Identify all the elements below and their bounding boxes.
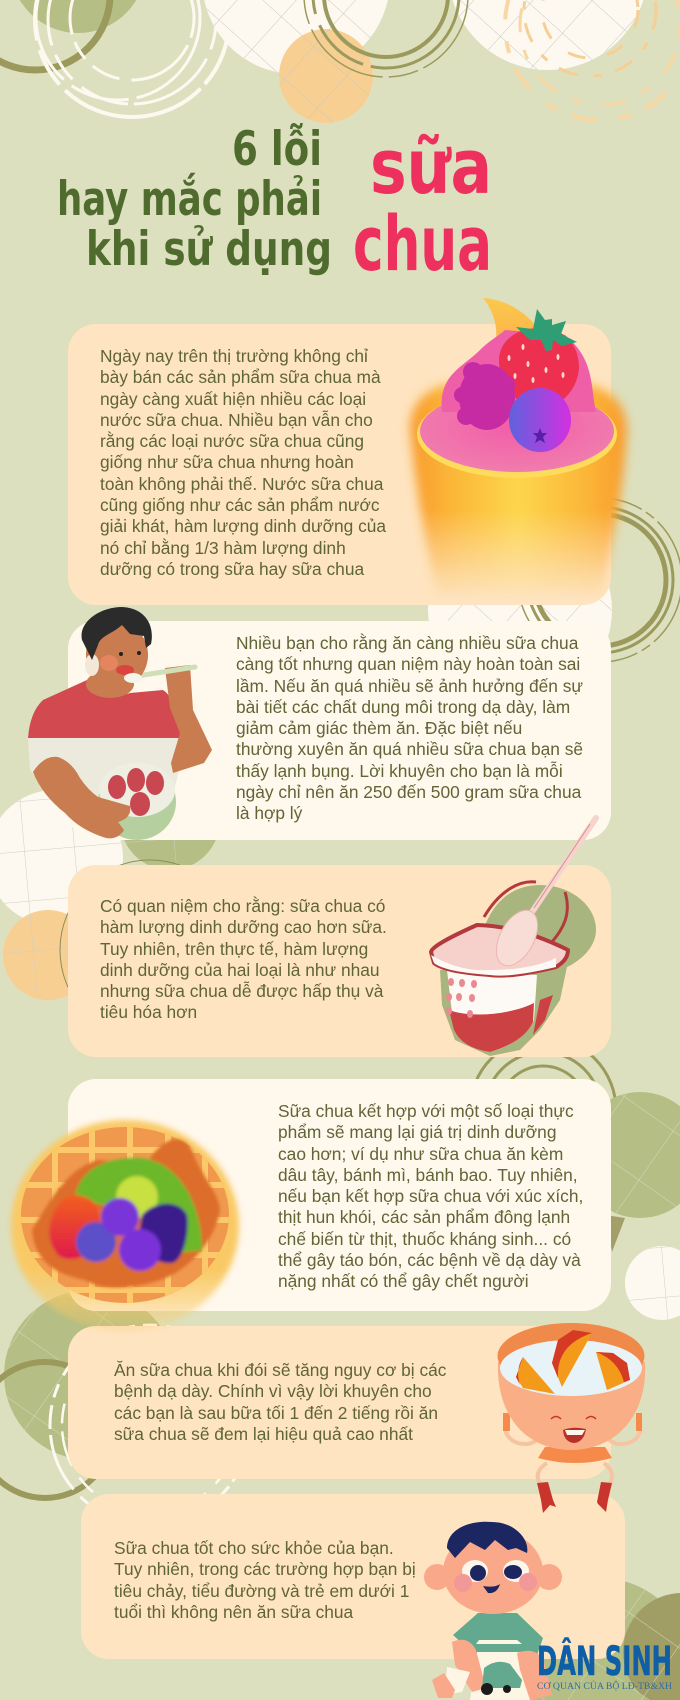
- panel 6: [81, 1494, 625, 1659]
- panel 2 text: là hợp lý: [236, 803, 302, 823]
- panel 4 text: phẩm sẽ mang lại giá trị dinh dưỡng: [278, 1122, 556, 1142]
- panel 6 text: tiêu chảy, tiểu đường và trẻ em dưới 1: [114, 1581, 409, 1601]
- panel 3 text: Có quan niệm cho rằng: sữa chua có: [100, 896, 385, 916]
- panel 4 text: [278, 1101, 583, 1291]
- panel 2 text: ngày chỉ nên ăn 250 đến 500 gram sữa chua: [236, 782, 581, 802]
- panel 5 text: sữa chua sẽ đem lại hiệu quả cao nhất: [114, 1424, 413, 1444]
- panel 4 text: nặng nhất có thể gây chết người: [278, 1271, 529, 1291]
- panel 4 text: chế biến từ thịt, thuốc kháng sinh... có: [278, 1229, 571, 1249]
- panel 3 text: nhưng sữa chua dễ được hấp thụ và: [100, 981, 383, 1001]
- panel 4 text: nếu bạn kết hợp sữa chua với xúc xích,: [278, 1186, 583, 1206]
- panel 1 text: ngày càng xuất hiện nhiều các loại: [100, 389, 366, 409]
- panel 4 text: cao hơn; ví dụ như sữa chua ăn kèm: [278, 1144, 563, 1164]
- panel 1 text: [100, 346, 386, 579]
- panel 1 text: bày bán các sản phẩm sữa chua mà: [100, 367, 381, 387]
- panel 4 text: Sữa chua kết hợp với một số loại thực: [278, 1101, 574, 1121]
- title: green heading: hay mắc phải: [57, 172, 322, 227]
- illustration: smiling yogurt bowl character: [498, 1323, 645, 1513]
- panel 5 text: [114, 1360, 446, 1444]
- panel 1 text: giống như sữa chua nhưng hoàn: [100, 452, 354, 472]
- title: green heading: khi sử dụng: [86, 222, 332, 277]
- panel 6 text: Sữa chua tốt cho sức khỏe của bạn.: [114, 1538, 394, 1558]
- illustration: waffle with fruit: [10, 1120, 250, 1332]
- panel 1 text: cũng giống như các sản phẩm nước: [100, 495, 380, 515]
- panel 1 text: rằng các loại nước sữa chua cũng: [100, 431, 364, 451]
- panel 6 text: [114, 1538, 416, 1622]
- panel 1 text: toàn không phải thế. Nước sữa chua: [100, 474, 383, 494]
- panel 2 text: thường xuyên ăn quá nhiều sữa chua bạn sẽ: [236, 739, 583, 759]
- panel 4 text: dâu tây, bánh mì, bánh bao. Tuy nhiên,: [278, 1165, 578, 1185]
- illustration: boy with toy car: [424, 1522, 562, 1700]
- panel 2 text: bài tiết các chất dung môi trong dạ dày, làm: [236, 697, 570, 717]
- panel 4 text: thể gây táo bón, các bệnh về dạ dày và: [278, 1250, 581, 1270]
- panel 1 text: nước sữa chua. Nhiều bạn vẫn cho: [100, 410, 373, 430]
- panel 2 text: Nhiều bạn cho rằng ăn càng nhiều sữa chua: [236, 633, 578, 653]
- panel 3 text: Tuy nhiên, trên thực tế, hàm lượng: [100, 939, 368, 959]
- title: green heading: 6 lỗi: [232, 122, 322, 177]
- panel 1: [68, 324, 611, 605]
- panel 1 text: giải khát, hàm lượng dinh dưỡng của: [100, 516, 386, 536]
- logo: Dân Sinh: CƠ QUAN CỦA BỘ LĐ-TB&XH: [537, 1680, 672, 1692]
- title: green heading: [57, 122, 332, 277]
- panel 2 text: càng tốt nhưng quan niệm này hoàn toàn sai: [236, 654, 580, 674]
- panel 5 text: bệnh dạ dày. Chính vì vậy lời khuyên cho: [114, 1381, 432, 1401]
- panel 3: [68, 865, 611, 1057]
- title: red heading: [353, 122, 492, 288]
- panel 3 text: tiêu hóa hơn: [100, 1002, 197, 1022]
- panel 3 text: dinh dưỡng của hai loại là như nhau: [100, 960, 380, 980]
- panel 2 text: thấy lạnh bụng. Lời khuyên cho bạn là mỗi: [236, 761, 563, 781]
- panel 1 text: Ngày nay trên thị trường không chỉ: [100, 346, 368, 366]
- panel 2: [68, 621, 611, 840]
- illustration: yogurt pot with spoon: [431, 818, 596, 1056]
- title: red heading: sữa: [370, 122, 492, 211]
- panel 4: [68, 1079, 611, 1311]
- panel 3 text: hàm lượng dinh dưỡng cao hơn sữa.: [100, 917, 387, 937]
- panel 1 text: dưỡng có trong sữa hay sữa chua: [100, 559, 364, 579]
- panel 5 text: các bạn là sau bữa tối 1 đến 2 tiếng rồi ăn: [114, 1403, 438, 1423]
- panel 2 text: giảm cảm giác thèm ăn. Đặc biệt nếu: [236, 718, 522, 738]
- title: [57, 122, 492, 288]
- panel 2 text: [236, 633, 583, 823]
- panel 3 text: [100, 896, 387, 1022]
- panel 5: [68, 1326, 611, 1479]
- panel 4 text: thịt hun khói, các sản phẩm đông lạnh: [278, 1207, 570, 1227]
- panel 2 text: lầm. Nếu ăn quá nhiều sẽ ảnh hưởng đến sự: [236, 676, 583, 696]
- panel 6 text: Tuy nhiên, trong các trường hợp bạn bị: [114, 1559, 416, 1579]
- panel 5 text: Ăn sữa chua khi đói sẽ tăng nguy cơ bị các: [114, 1360, 446, 1380]
- illustration: man eating yogurt: [28, 607, 212, 840]
- panel 1 text: nó chỉ bằng 1/3 hàm lượng dinh: [100, 538, 346, 558]
- illustration: yogurt cup with berries: [410, 298, 627, 605]
- panel 6 text: tuổi thì không nên ăn sữa chua: [114, 1602, 353, 1622]
- title: red heading: chua: [353, 199, 492, 288]
